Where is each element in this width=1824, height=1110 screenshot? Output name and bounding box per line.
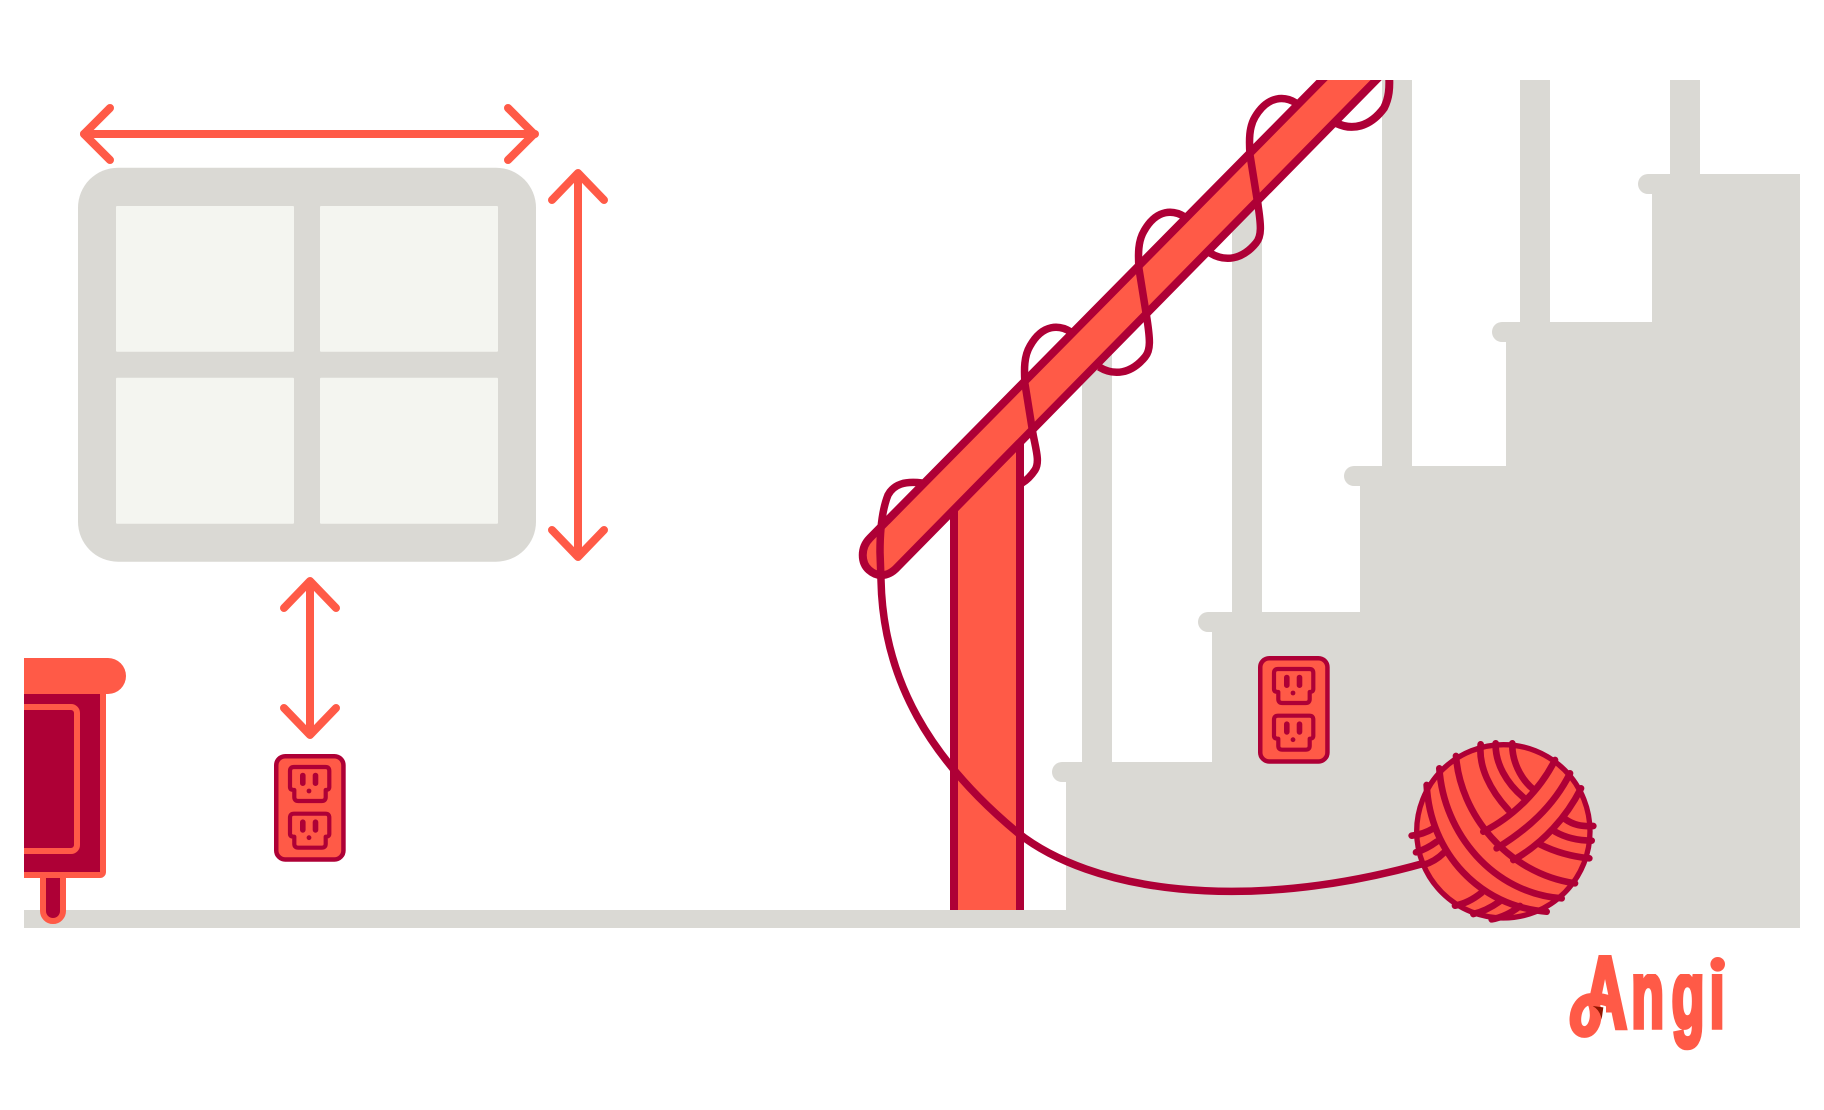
yarn loop 4 far end: [1336, 74, 1389, 127]
baluster 3: [1382, 80, 1412, 467]
sweeping strands: [1427, 756, 1575, 912]
step 3: [1344, 466, 1800, 613]
baluster 1: [1082, 348, 1112, 763]
logo letters ngi: ngi: [1631, 942, 1725, 1048]
logo letter A: A: [1583, 937, 1627, 1049]
yarn loop 1: [1022, 327, 1071, 483]
sideboard leg: [43, 875, 63, 921]
logo i dot: [1710, 957, 1725, 972]
sideboard top: [24, 658, 126, 694]
bottom strands: [1455, 893, 1520, 919]
window pane: bottom right: [320, 378, 498, 524]
crossing strands: [1483, 760, 1581, 860]
sideboard door: [24, 704, 80, 854]
window pane: bottom left: [116, 378, 294, 524]
arrow: window to outlet distance: [284, 581, 336, 735]
right strands: [1540, 819, 1593, 858]
outlet below window: [276, 756, 343, 859]
window pane: top right: [320, 206, 498, 352]
arrow: window width: [84, 108, 535, 160]
yarn ball: [1412, 743, 1593, 919]
logo swoosh: [1575, 999, 1610, 1032]
sideboard body: [24, 694, 106, 878]
window pane: top left: [116, 206, 294, 352]
yarn loop 3: [1210, 99, 1296, 258]
step 2: [1198, 612, 1800, 763]
logo swoosh shadow: [1593, 1006, 1603, 1019]
newel post: [954, 440, 1020, 910]
step 4: [1492, 322, 1800, 467]
outlet on stairs: [1260, 658, 1327, 761]
yarn strand running from rail to ball: [880, 482, 1425, 891]
sideboard furniture: [24, 658, 126, 924]
baluster 5: [1670, 80, 1700, 175]
left strands: [1412, 828, 1444, 865]
yarn wrapped around handrail: [880, 99, 1425, 891]
step 1: [1052, 762, 1800, 911]
yarn loops behind the rail: [1336, 74, 1389, 127]
staircase silhouette: [1052, 80, 1800, 911]
window: [78, 168, 536, 562]
baluster 2: [1232, 195, 1262, 613]
arrow: window height: [552, 173, 604, 557]
baluster 4: [1520, 80, 1550, 323]
floor: [24, 910, 1800, 928]
upper strands: [1480, 743, 1533, 810]
step 5: [1638, 174, 1800, 323]
handrail: [863, 71, 1385, 575]
yarn loop 2: [1099, 212, 1185, 372]
Angi logo: [1570, 955, 1725, 1050]
ball body: [1417, 745, 1590, 918]
